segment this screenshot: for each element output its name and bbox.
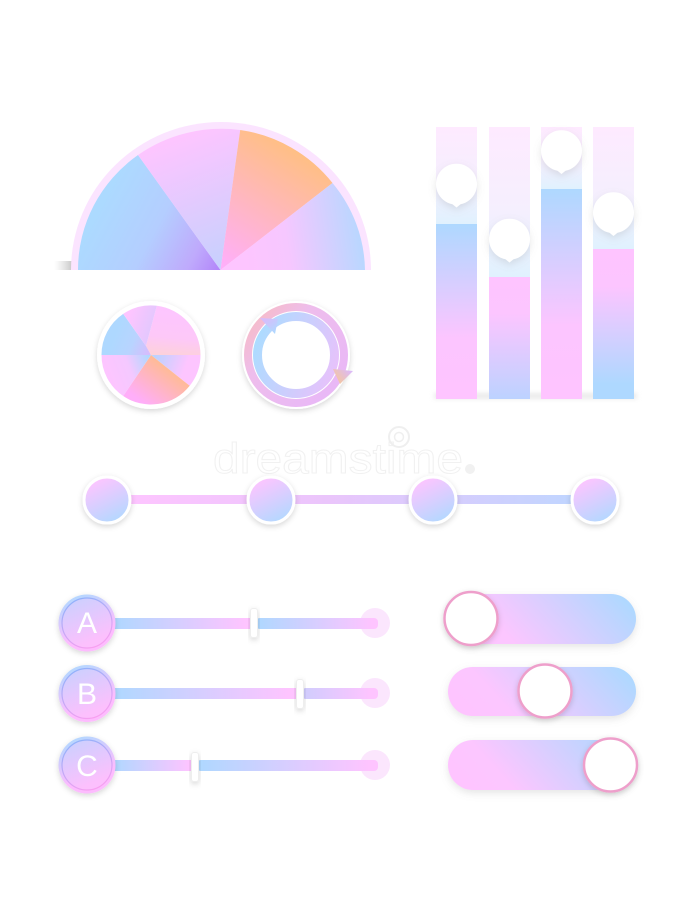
pie slice top lilac bbox=[123, 305, 157, 346]
arrow head lower right bbox=[333, 369, 353, 384]
bar 3 bbox=[541, 127, 582, 399]
badge B: B bbox=[77, 678, 97, 711]
semicircle gauge chart bbox=[54, 122, 371, 270]
node 3 bbox=[410, 477, 456, 523]
bar 2 bbox=[489, 127, 530, 399]
pie slice right bbox=[151, 355, 200, 386]
badge A: A bbox=[77, 607, 97, 640]
vertical bar chart with bubble markers bbox=[434, 127, 637, 399]
bar 1 bbox=[436, 127, 477, 399]
gauge segment: pink lilac bbox=[138, 129, 240, 270]
watermark: dreamstime bbox=[213, 435, 463, 483]
badge B bbox=[58, 665, 116, 722]
pie slice upper left blue bbox=[101, 314, 151, 355]
arrow head upper left bbox=[260, 318, 278, 334]
outer ring band bbox=[248, 307, 344, 403]
toggle switch 2 bbox=[448, 664, 636, 718]
gauge outer rim bbox=[71, 122, 371, 270]
pie slice bottom orange bbox=[123, 355, 190, 405]
gauge segment: blue purple bbox=[78, 155, 221, 270]
circular arrows ring bbox=[242, 301, 353, 409]
node 2 bbox=[248, 477, 294, 523]
slider A bbox=[58, 594, 390, 652]
inner ring band bbox=[258, 316, 334, 394]
bar 4 bbox=[593, 127, 634, 399]
toggle switch 1 bbox=[444, 592, 636, 645]
node 4 bbox=[572, 477, 618, 523]
gauge segment: pink blue bbox=[220, 183, 365, 270]
gauge segment: orange pink bbox=[220, 130, 332, 270]
node 1 bbox=[84, 477, 130, 523]
timeline connector bbox=[130, 495, 572, 504]
slider C bbox=[58, 736, 390, 794]
badge A bbox=[58, 594, 116, 652]
pie slice lower left bbox=[101, 355, 151, 396]
pie slice top right bbox=[146, 306, 201, 355]
badge C: C bbox=[76, 750, 98, 783]
toggle switch 3 bbox=[448, 738, 637, 792]
slider B bbox=[58, 665, 390, 722]
timeline with four nodes bbox=[84, 477, 618, 523]
badge C bbox=[58, 736, 116, 794]
small pie chart bbox=[97, 301, 205, 409]
